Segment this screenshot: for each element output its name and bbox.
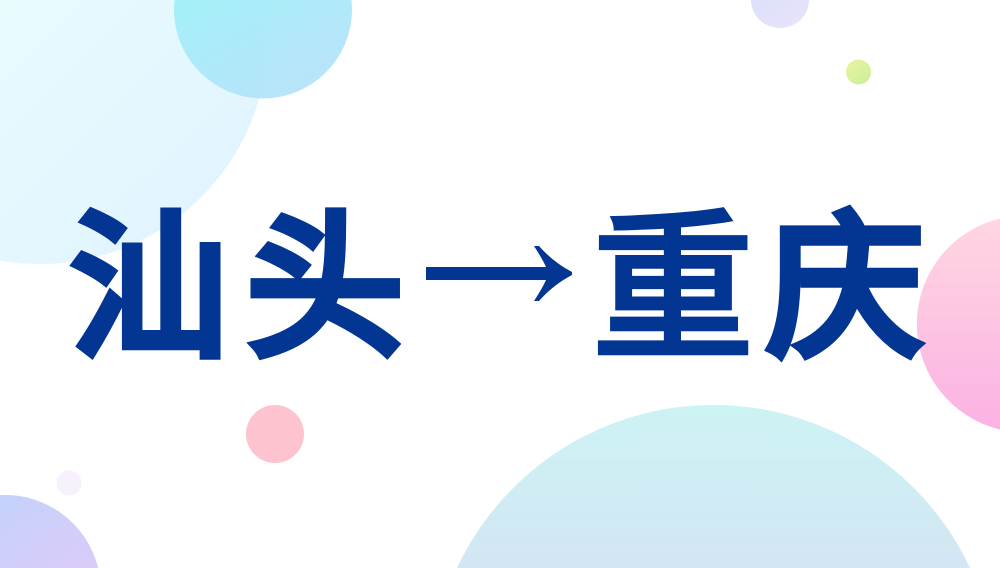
title: 庆: [766, 160, 924, 389]
bubble: bottom large aqua: [457, 405, 970, 568]
bubble: small pale lilac: [56, 470, 82, 496]
bubble: top cyan: [174, 0, 352, 98]
title: 重: [592, 157, 754, 392]
bubble: top lavender: [751, 0, 809, 28]
bubble: large top-left: [0, 0, 268, 264]
bubble: bottom-left periwinkle: [0, 495, 98, 568]
bubble: small green: [846, 60, 871, 84]
bubble: right pink: [917, 218, 1000, 430]
title: 汕: [70, 160, 228, 389]
bubble: small coral: [246, 405, 304, 463]
title: 头: [246, 160, 404, 389]
